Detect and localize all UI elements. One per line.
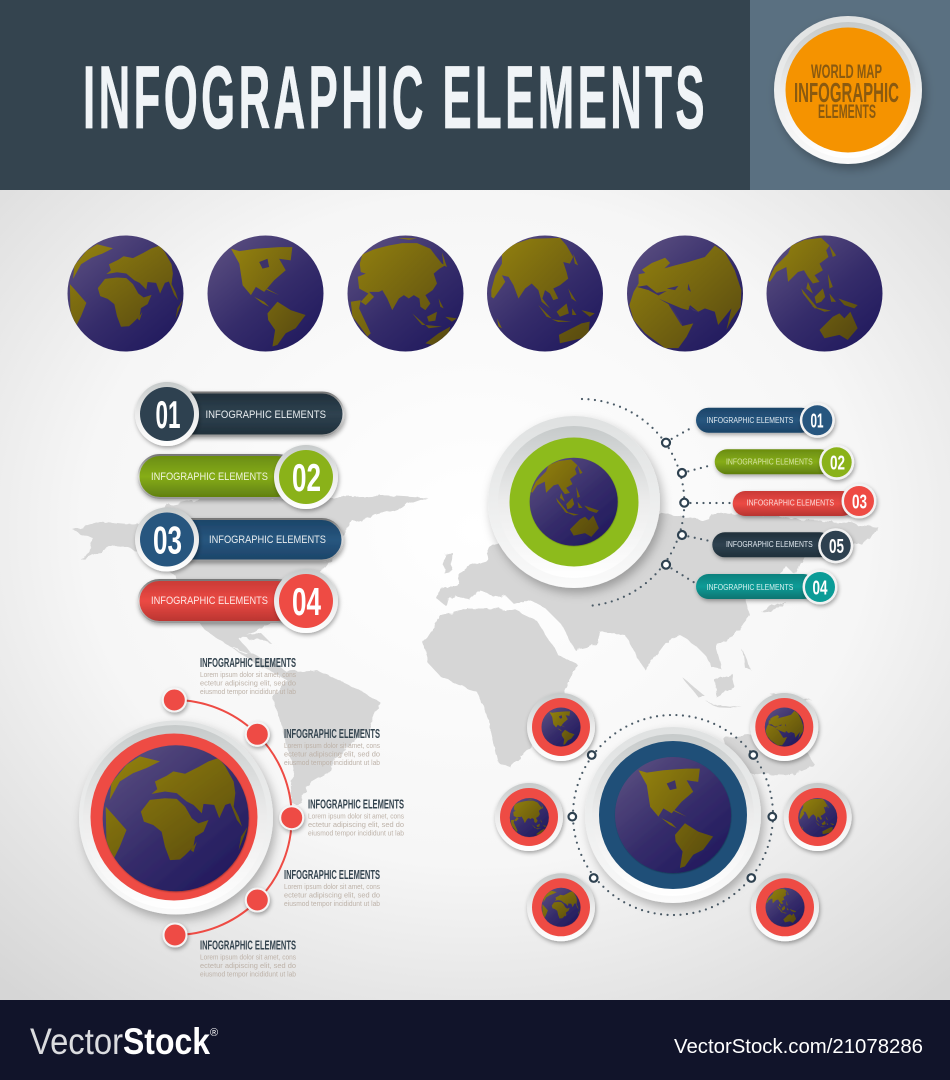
globe: Eurasia	[627, 236, 743, 351]
label 02	[715, 445, 854, 480]
satellite top left	[527, 693, 595, 761]
text block 1	[200, 656, 296, 696]
label 05	[712, 528, 853, 563]
text block 2	[284, 727, 380, 767]
satellite middle left	[495, 783, 563, 851]
label 04	[696, 570, 838, 604]
pill 02: 02	[292, 457, 321, 500]
label 04: 04	[812, 578, 828, 600]
satellite top right	[750, 693, 818, 761]
label 03: INFOGRAPHIC ELEMENTS	[747, 498, 834, 508]
stock id: VectorStock.com/21078286	[674, 1035, 923, 1058]
text block 3: eiusmod tempor incididunt ut lab	[308, 828, 404, 838]
text block 2: eiusmod tempor incididunt ut lab	[284, 758, 380, 767]
pill 03: 03	[153, 520, 182, 562]
label 02: 02	[830, 452, 845, 474]
text block 4	[284, 868, 380, 908]
orbit rings	[568, 751, 776, 882]
text block 1: eiusmod tempor incididunt ut lab	[200, 687, 296, 696]
satellite bottom left	[527, 873, 595, 941]
dotted connectors	[582, 399, 730, 606]
globe: Africa	[68, 236, 183, 351]
pill 04: 04	[292, 581, 321, 624]
red arc	[174, 700, 292, 935]
label 01	[696, 403, 835, 438]
text block 3: ectetur adipiscing elit, sed do	[308, 820, 404, 829]
label 05: INFOGRAPHIC ELEMENTS	[726, 540, 813, 549]
logo text: ®	[210, 1027, 218, 1039]
text block 1: Lorem ipsum dolor sit amet, cons	[200, 670, 296, 679]
text block 2: ectetur adipiscing elit, sed do	[284, 750, 380, 758]
header bar	[0, 0, 950, 190]
green globe	[488, 416, 660, 588]
text block 1: ectetur adipiscing elit, sed do	[200, 678, 296, 688]
panel: red globe timeline	[79, 656, 404, 978]
pill 01: INFOGRAPHIC ELEMENTS	[206, 409, 326, 421]
pill 01	[135, 382, 344, 446]
timeline nodes	[163, 688, 303, 946]
panel: blue globe with satellites	[495, 693, 852, 941]
world map	[73, 495, 878, 803]
globe: South East Asia	[487, 236, 603, 351]
text block 4: INFOGRAPHIC ELEMENTS	[284, 868, 380, 882]
satellite middle right	[784, 783, 852, 851]
text block 4: ectetur adipiscing elit, sed do	[284, 890, 380, 900]
large blue globe	[585, 727, 761, 903]
label 02: INFOGRAPHIC ELEMENTS	[726, 458, 813, 466]
label 05: 05	[829, 536, 844, 558]
panel: left numbered pills	[135, 382, 344, 633]
text block 3: Lorem ipsum dolor sit amet, cons	[308, 812, 404, 820]
label 01: 01	[810, 410, 824, 432]
text block 5: eiusmod tempor incididunt ut lab	[200, 970, 296, 978]
label 03: 03	[852, 492, 867, 514]
pill 03: INFOGRAPHIC ELEMENTS	[209, 534, 326, 546]
globe: Americas	[208, 236, 323, 351]
text block 5: Lorem ipsum dolor sit amet, cons	[200, 952, 296, 962]
pill 01: 01	[156, 394, 180, 437]
pill 04	[138, 569, 338, 633]
logo text: VectorStock	[30, 1021, 224, 1062]
text block 5: ectetur adipiscing elit, sed do	[200, 961, 296, 970]
globe: Asia	[348, 236, 463, 351]
text block 3: INFOGRAPHIC ELEMENTS	[308, 798, 404, 812]
badge: world map infographic elements	[774, 16, 922, 164]
pill 02	[138, 445, 338, 509]
label 01: INFOGRAPHIC ELEMENTS	[707, 416, 793, 425]
badge: world map infographic elements: ELEMENTS	[818, 102, 876, 123]
background panel	[0, 190, 950, 1000]
footer bar	[0, 1000, 950, 1080]
text block 4: eiusmod tempor incididunt ut lab	[284, 899, 380, 908]
text block 4: Lorem ipsum dolor sit amet, cons	[284, 882, 380, 891]
text block 2: Lorem ipsum dolor sit amet, cons	[284, 741, 380, 750]
panel: green globe with labels	[488, 399, 876, 606]
pill 02: INFOGRAPHIC ELEMENTS	[151, 471, 268, 483]
ring markers	[662, 439, 688, 569]
text block 5: INFOGRAPHIC ELEMENTS	[200, 938, 296, 952]
label 03	[733, 484, 876, 518]
label 04: INFOGRAPHIC ELEMENTS	[707, 583, 793, 592]
text block 2: INFOGRAPHIC ELEMENTS	[284, 727, 380, 741]
globe: Oceania	[767, 236, 882, 351]
text block 1: INFOGRAPHIC ELEMENTS	[200, 656, 296, 670]
text block 3	[308, 798, 404, 838]
badge: world map infographic elements: WORLD MAP	[811, 62, 882, 83]
dotted orbit	[573, 715, 773, 915]
satellite bottom right	[751, 873, 819, 941]
pill 04: INFOGRAPHIC ELEMENTS	[151, 595, 268, 607]
row of six globes	[68, 236, 882, 351]
pill 03	[135, 508, 342, 572]
text block 5	[200, 938, 296, 978]
large red globe	[79, 720, 273, 914]
